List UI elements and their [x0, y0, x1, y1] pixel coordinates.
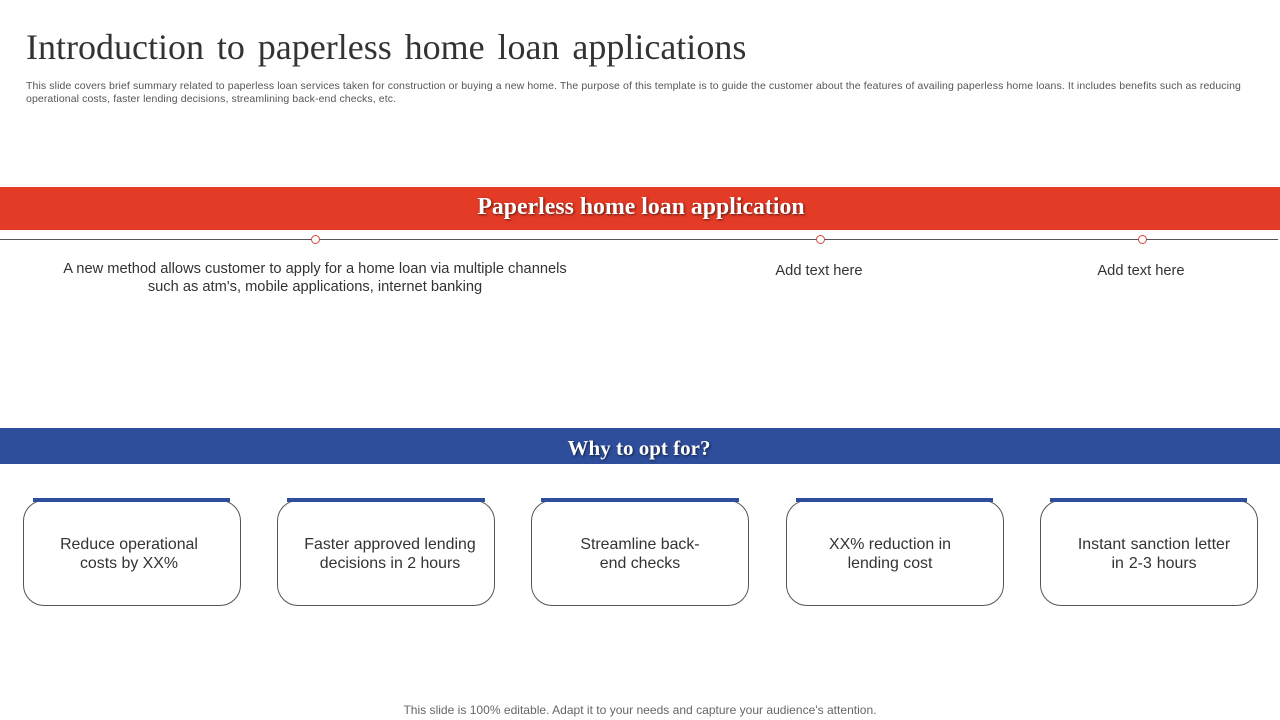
timeline text 1: [63, 261, 567, 295]
card 3: [531, 500, 749, 606]
blue banner: [0, 428, 1280, 464]
description text: [26, 80, 1241, 104]
description text: operational costs, faster lending decisions, streamlining back-end checks, etc.: [26, 92, 396, 104]
card 4 text: [829, 536, 951, 572]
card 1 text: [60, 536, 198, 572]
card 1: [23, 500, 241, 606]
red banner heading: Paperless home loan application: [477, 194, 805, 220]
card 3 text: Streamline back-: [580, 536, 700, 553]
card 5 text: Instant sanction letter: [1078, 536, 1230, 553]
description text: This slide covers brief summary related to paperless loan services taken for construction or buying a new home. The purpose of this template is to guide the customer about the features of availing paperless home loans. It includes benefits such as reducing: [26, 80, 1241, 92]
card 5 text: in 2-3 hours: [1111, 555, 1197, 572]
card 1 accent: [33, 498, 230, 502]
card 5 text: [1078, 536, 1230, 572]
card 5 accent: [1050, 498, 1247, 502]
timeline: [0, 239, 1278, 240]
card 2: [277, 500, 495, 606]
timeline marker 1: [311, 235, 320, 244]
card 2 accent: [287, 498, 485, 502]
timeline text 2: Add text here: [775, 263, 863, 279]
card 1 text: Reduce operational: [60, 536, 198, 553]
timeline marker 2: [816, 235, 825, 244]
card 3 accent: [541, 498, 739, 502]
timeline text 1: such as atm's, mobile applications, internet banking: [148, 279, 482, 295]
card 4 text: XX% reduction in: [829, 536, 951, 553]
card 3 text: [580, 536, 700, 572]
card 1 text: costs by XX%: [80, 555, 178, 572]
card 4 text: lending cost: [848, 555, 932, 572]
card 2 text: [304, 536, 476, 572]
card 4: [786, 500, 1004, 606]
footer note: This slide is 100% editable. Adapt it to your needs and capture your audience's attention.: [403, 703, 877, 717]
title: Introduction to paperless home loan applications: [26, 27, 746, 67]
timeline marker 3: [1138, 235, 1147, 244]
red banner: [0, 187, 1280, 230]
card 3 text: end checks: [600, 555, 680, 572]
timeline text 1: A new method allows customer to apply for a home loan via multiple channels: [63, 261, 567, 277]
card 4 accent: [796, 498, 993, 502]
timeline text 3: Add text here: [1097, 263, 1185, 279]
card 5: [1040, 500, 1258, 606]
card 2 text: Faster approved lending: [304, 536, 476, 553]
blue banner heading: Why to opt for?: [568, 436, 710, 460]
card 2 text: decisions in 2 hours: [320, 555, 460, 572]
